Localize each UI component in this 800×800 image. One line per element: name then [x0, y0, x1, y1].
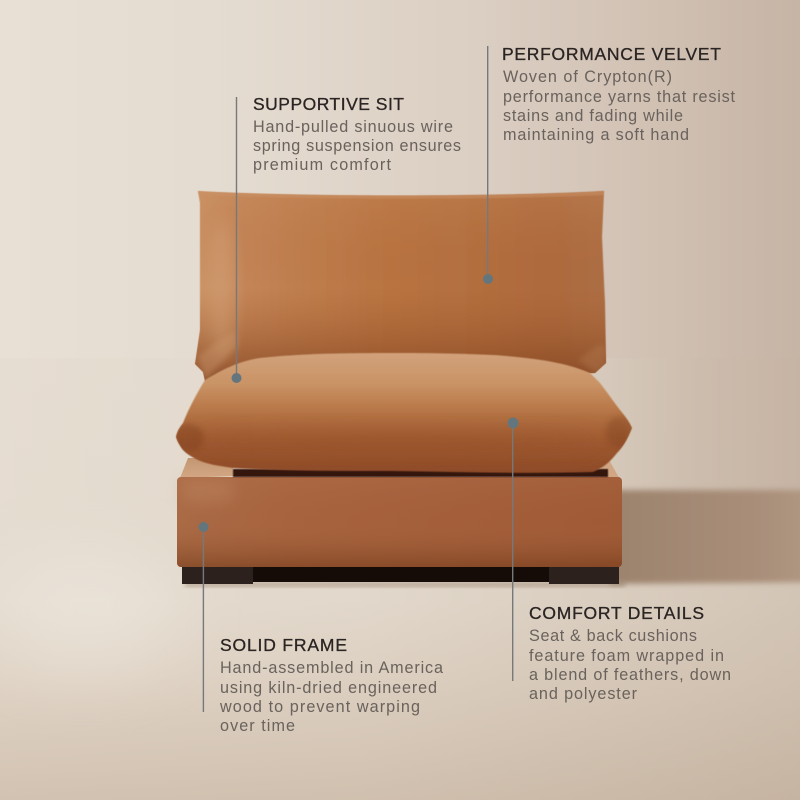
body text: comfort details: feature foam wrapped in [529, 647, 724, 665]
heading: performance velvet: PERFORMANCE VELVET [502, 44, 721, 64]
body text: performance velvet: Woven of Crypton(R) [503, 68, 672, 86]
body text: comfort details: Seat & back cushions [529, 627, 697, 645]
body text: solid frame: Hand-assembled in America [220, 659, 443, 677]
callout: solid frame [198, 522, 443, 735]
body text: performance velvet [503, 68, 736, 144]
body text: comfort details [529, 627, 731, 703]
callout: supportive sit [232, 94, 461, 383]
body text: comfort details: a blend of feathers, down [529, 666, 731, 684]
heading: supportive sit: SUPPORTIVE SIT [253, 94, 404, 114]
body text: supportive sit: premium comfort [253, 156, 392, 174]
wooden feet [182, 567, 619, 584]
body text: solid frame: over time [220, 717, 295, 735]
body text: comfort details: and polyester [529, 685, 638, 703]
body text: supportive sit: spring suspension ensures [253, 137, 461, 155]
body text: performance velvet: stains and fading while [503, 107, 683, 125]
leader line and dot [198, 522, 208, 712]
leader line and dot [508, 418, 518, 681]
base frame [177, 458, 622, 567]
sofa illustration [172, 190, 634, 584]
body text: solid frame [219, 659, 443, 735]
body text: supportive sit: Hand-pulled sinuous wire [253, 118, 453, 136]
heading: comfort details: COMFORT DETAILS [529, 603, 704, 623]
body text: supportive sit [253, 118, 461, 174]
seat cushion [172, 353, 634, 473]
body text: solid frame: wood to prevent warping [219, 698, 420, 716]
heading: solid frame: SOLID FRAME [220, 635, 347, 655]
leader line and dot [232, 97, 242, 383]
body text: performance velvet: performance yarns that resist [503, 88, 736, 106]
callout: comfort details [508, 418, 731, 703]
back cushion [195, 190, 607, 385]
leader line and dot [483, 46, 493, 284]
callout: performance velvet [483, 44, 736, 284]
body text: performance velvet: maintaining a soft hand [503, 126, 689, 144]
body text: solid frame: using kiln-dried engineered [220, 679, 437, 697]
